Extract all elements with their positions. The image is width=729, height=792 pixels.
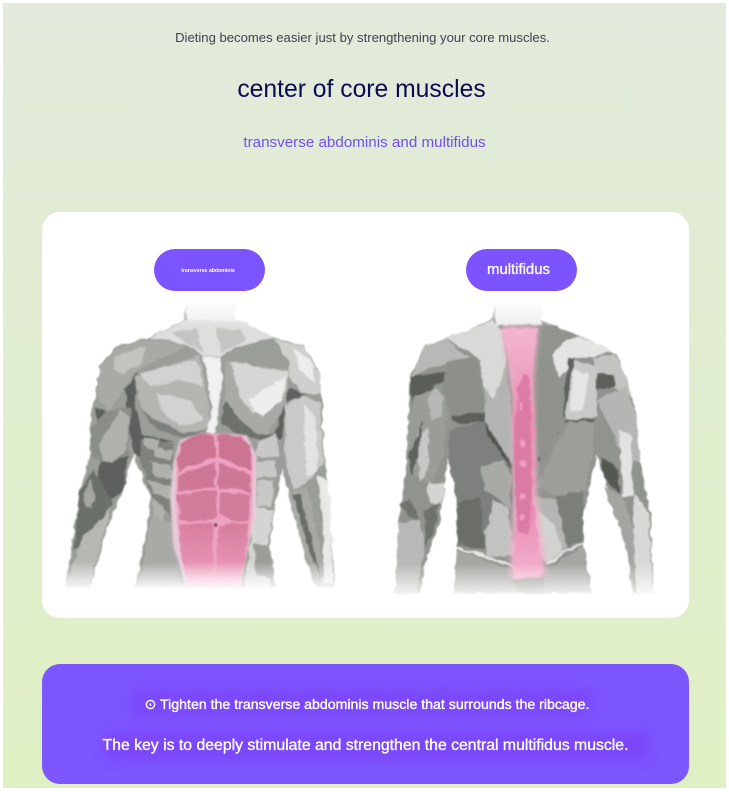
dark creases [95, 372, 307, 500]
shoulders [97, 338, 187, 412]
abdominis blocks [170, 433, 257, 588]
right arm [597, 387, 640, 463]
figure: back torso with highlighted multifidus [377, 298, 670, 609]
panel: muscle diagrams [42, 212, 689, 618]
neck [495, 302, 542, 325]
callout line one: ⊙ Tighten the transverse abdominis muscle that surrounds the ribcage. [145, 696, 589, 712]
multifidus highlight [501, 327, 547, 580]
subtitle: transverse abdominis and multifidus [243, 134, 486, 151]
ribs and obliques [140, 440, 173, 520]
navel [213, 522, 218, 528]
callout: key points [42, 664, 689, 784]
intro sentence: Dieting becomes easier just by strengthening your core muscles. [175, 30, 550, 45]
pecs [135, 355, 210, 438]
right arm [285, 395, 323, 490]
label: transverse abdominis [154, 249, 265, 291]
shoulders [443, 322, 507, 400]
label: multifidus: multifidus [487, 262, 550, 278]
upper spine region [485, 363, 513, 463]
neck and collar [187, 302, 235, 323]
lats [448, 422, 513, 547]
title: center of core muscles [237, 76, 486, 103]
callout line two: The key is to deeply stimulate and strengthen the central multifidus muscle. [103, 737, 628, 754]
left arm [90, 407, 132, 460]
left arm [407, 387, 448, 487]
shoulder blades [440, 358, 485, 417]
waistband [457, 543, 583, 567]
label: transverse abdominis: transverse abdominis [181, 268, 235, 274]
dark deltoid creases [410, 372, 450, 405]
figure: front torso with highlighted abdominis [60, 298, 340, 599]
label: multifidus [466, 249, 577, 291]
sternum [203, 357, 223, 433]
